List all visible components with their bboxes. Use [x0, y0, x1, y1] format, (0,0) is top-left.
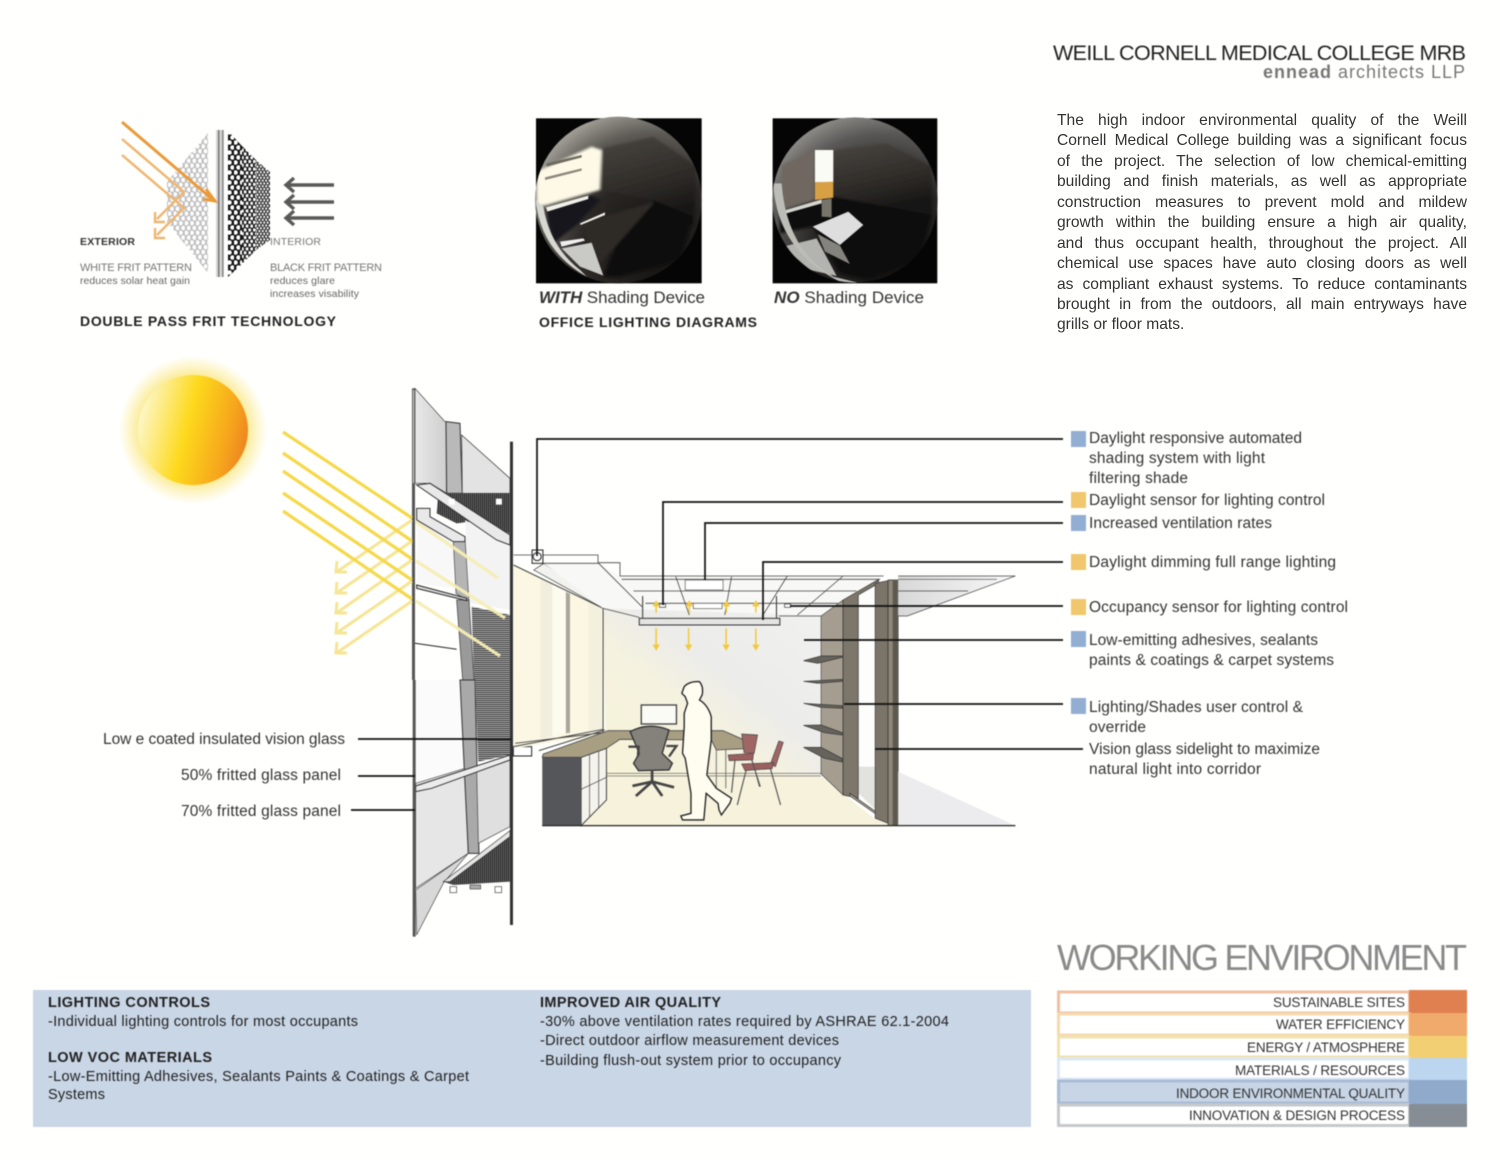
legend row: indoor environmental quality: [1058, 1080, 1467, 1104]
orange solar arrows: [122, 122, 215, 238]
label text: Daylight sensor for lighting control: [1089, 492, 1325, 509]
text block: project description: brought in from the outdoors, all main entryways have: [1057, 296, 1467, 313]
label text: Low-emitting adhesives, sealants: [1089, 632, 1318, 649]
facade section upper: [412, 388, 513, 680]
shelving and storage wall: [804, 600, 843, 795]
corridor ceiling and floor: [898, 576, 1015, 826]
legend: LEED categories: [1058, 990, 1467, 1127]
incoming rays: [283, 432, 412, 599]
legend row: innovation and design process: INNOVATION & DESIGN PROCESS: [1189, 1108, 1405, 1123]
lighting controls text: LIGHTING CONTROLS: [48, 995, 210, 1011]
legend row: energy / atmosphere: ENERGY / ATMOSPHERE: [1247, 1040, 1405, 1055]
red chairs: [728, 734, 783, 805]
label text: Occupancy sensor for lighting control: [1089, 599, 1348, 616]
light arrows: [654, 602, 758, 649]
low voc text: -Low-Emitting Adhesives, Sealants Paints & Coatings & Carpet: [48, 1069, 469, 1085]
low voc text: LOW VOC MATERIALS: [48, 1050, 212, 1066]
black frit panel: [228, 131, 270, 277]
frit labels: reduces glare: [270, 275, 335, 287]
lighting controls text: [48, 995, 358, 1030]
monitor: [641, 705, 676, 724]
legend row: innovation and design process: [1058, 1104, 1467, 1127]
frit labels: BLACK FRIT PATTERN: [270, 262, 382, 274]
frit labels: WHITE FRIT PATTERN: [80, 262, 192, 274]
legend row: sustainable sites: [1058, 990, 1467, 1013]
glass pane: [216, 130, 224, 277]
grey glare arrows: [286, 178, 334, 225]
label text: shading system with light: [1089, 450, 1266, 467]
callouts: left glazing labels: [103, 731, 345, 820]
transmitted rays: [416, 522, 505, 656]
fisheye captions: WITH Shading Device: [539, 288, 705, 307]
callouts: left glazing labels: 50% fritted glass panel: [181, 767, 341, 784]
low voc text: Systems: [48, 1087, 105, 1103]
legend row: water efficiency: [1058, 1013, 1467, 1036]
office lighting heading: OFFICE LIGHTING DIAGRAMS: [539, 314, 757, 330]
diagram: double pass frit technology: [80, 122, 382, 329]
desk and cabinets: [542, 731, 752, 826]
label text: override: [1089, 719, 1146, 736]
callouts: left glazing labels: Low e coated insulated vision glass: [103, 731, 345, 748]
icon: sun: [119, 356, 267, 504]
text block: project description: and thus occupant health, throughout the project. All: [1057, 235, 1467, 252]
diagram: office lighting fisheye with shading: [535, 117, 702, 283]
fisheye captions: [539, 288, 924, 307]
diagram: office lighting fisheye without shading: [772, 117, 938, 284]
text block: project description: chemical use spaces have auto closing doors as well: [1057, 255, 1467, 272]
sunlight arrows: [283, 432, 505, 656]
text block: project description: Cornell Medical College building was a significant focus: [1057, 132, 1467, 149]
legend row: indoor environmental quality: INDOOR ENVIRONMENTAL QUALITY: [1176, 1086, 1405, 1101]
text block: project description: grills or floor mats.: [1057, 316, 1184, 333]
frit labels: INTERIOR: [270, 236, 321, 248]
text block: project description: construction measures to prevent mold and mildew: [1057, 194, 1467, 211]
frit labels: increases visability: [270, 288, 360, 300]
label text: Increased ventilation rates: [1089, 515, 1272, 532]
label text: [1089, 430, 1348, 778]
frit labels: [80, 236, 382, 300]
legend row: energy / atmosphere: [1058, 1036, 1467, 1058]
text block: project description: The high indoor environmental quality of the Weill: [1057, 112, 1467, 129]
callout leaders left: [351, 739, 511, 810]
corridor door frame: [843, 579, 898, 826]
light fixture: [639, 596, 791, 625]
text block: project description: as compliant exhaust systems. To reduce contaminants: [1057, 276, 1467, 292]
panel: credit summary: [33, 990, 1031, 1127]
frit heading: DOUBLE PASS FRIT TECHNOLOGY: [80, 313, 337, 329]
legend row: materials / resources: [1058, 1058, 1467, 1080]
text block: project description: of the project. The selection of low chemical-emitting: [1057, 153, 1467, 170]
facade section lower: [413, 680, 532, 937]
title block: WEILL CORNELL MEDICAL COLLEGE MRB: [1053, 41, 1466, 65]
title block: ennead architects LLP: [1263, 62, 1465, 82]
air quality text: -Building flush-out system prior to occupancy: [540, 1053, 842, 1069]
label text: Daylight dimming full range lighting: [1089, 554, 1336, 571]
floor line: [542, 824, 1015, 828]
low voc text: [48, 1050, 469, 1103]
air quality text: IMPROVED AIR QUALITY: [540, 995, 721, 1011]
title block: [1053, 41, 1466, 82]
legend row: sustainable sites: SUSTAINABLE SITES: [1273, 995, 1405, 1010]
legend row: materials / resources: MATERIALS / RESOURCES: [1235, 1063, 1405, 1078]
text block: project description: building and finish materials, as well as appropriate: [1057, 173, 1467, 190]
callouts: right system labels: [1071, 430, 1348, 778]
frit labels: EXTERIOR: [80, 236, 135, 248]
label text: Daylight responsive automated: [1089, 430, 1302, 447]
frit labels: reduces solar heat gain: [80, 275, 190, 287]
air quality text: -Direct outdoor airflow measurement devices: [540, 1033, 839, 1049]
reflected rays: [336, 520, 412, 653]
window wall: [514, 563, 605, 751]
label text: paints & coatings & carpet systems: [1089, 652, 1334, 669]
text block: project description: [1057, 112, 1467, 333]
text block: project description: growth within the building ensure a high air quality,: [1057, 214, 1467, 231]
label text: natural light into corridor: [1089, 761, 1261, 778]
floor: [581, 776, 894, 826]
white frit panel: [167, 133, 208, 273]
swatches: [1071, 431, 1086, 714]
person silhouette: [681, 682, 732, 820]
air quality text: -30% above ventilation rates required by ASHRAE 62.1-2004: [540, 1014, 949, 1030]
section heading: WORKING ENVIRONMENT: [1057, 937, 1467, 978]
label text: filtering shade: [1089, 470, 1188, 487]
label text: Vision glass sidelight to maximize: [1089, 741, 1320, 758]
callout leaders right: [537, 439, 1083, 749]
fisheye captions: NO Shading Device: [774, 288, 924, 307]
back wall: [603, 608, 821, 776]
callouts: left glazing labels: 70% fritted glass panel: [181, 803, 341, 820]
ceiling: [514, 550, 884, 617]
office chair: [628, 726, 676, 796]
lighting controls text: -Individual lighting controls for most occupants: [48, 1014, 358, 1030]
section perspective: office room: [514, 550, 1015, 826]
legend row: water efficiency: WATER EFFICIENCY: [1276, 1017, 1405, 1032]
air quality text: [540, 995, 949, 1069]
label text: Lighting/Shades user control &: [1089, 699, 1304, 716]
